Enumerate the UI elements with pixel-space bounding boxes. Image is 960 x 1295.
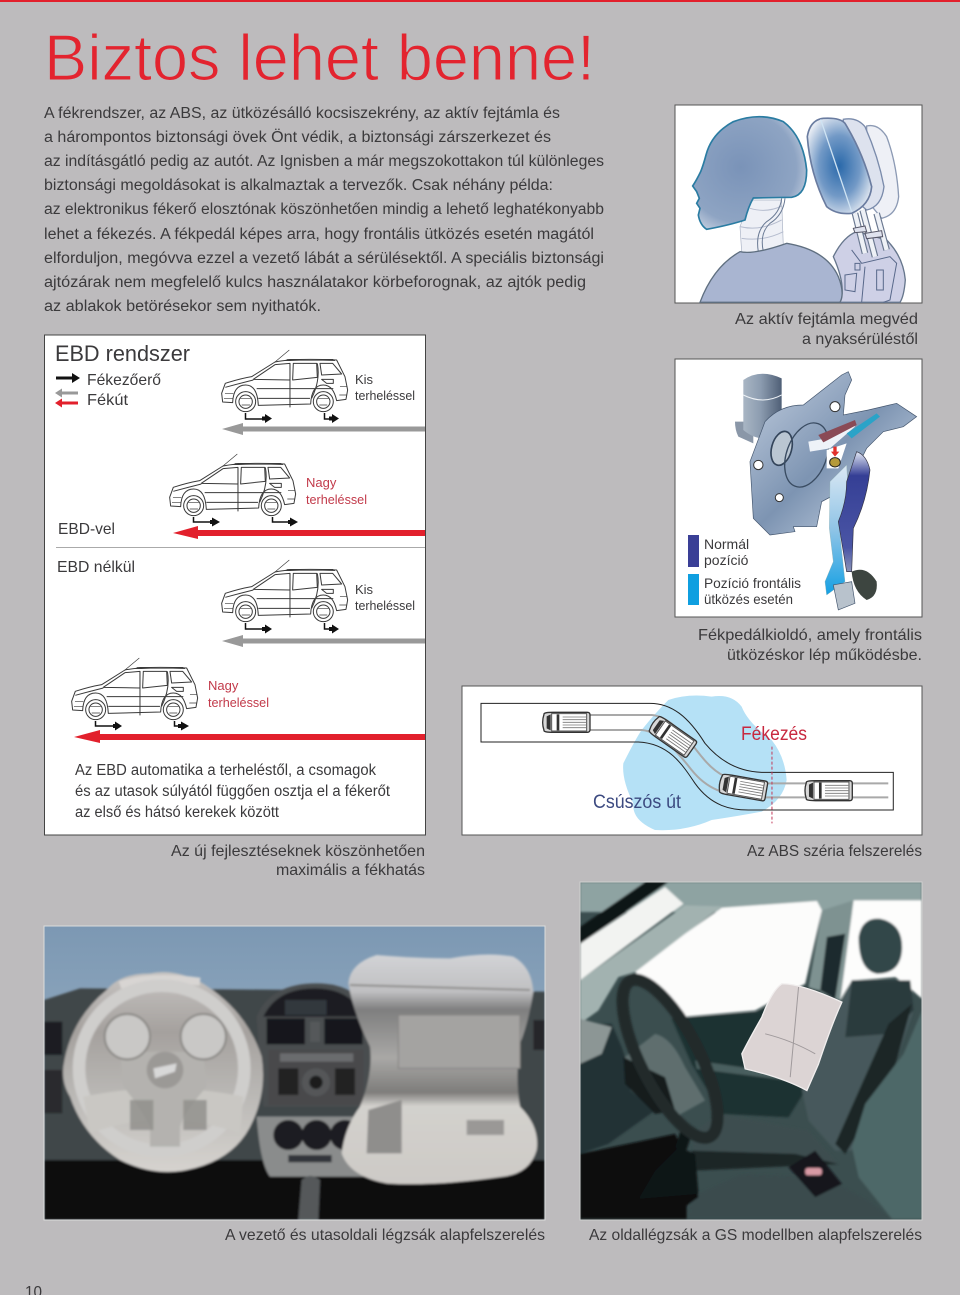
icon: headrest motion (807, 118, 899, 302)
caption: brake pedal: ütközéskor lép működésbe. (727, 647, 922, 664)
car: no EBD with light load (222, 560, 425, 647)
car: no EBD with heavy load (72, 658, 425, 743)
top red rule (0, 0, 960, 2)
caption: new developments: maximális a fékhatás (276, 862, 425, 879)
car position 4 (805, 781, 852, 801)
caption: new developments: Az új fejlesztéseknek köszönhetően (171, 843, 425, 860)
caption: new developments (171, 843, 425, 879)
icon: seat back (833, 232, 905, 302)
car position 3 (718, 773, 768, 801)
car: no EBD with heavy load: Nagy (208, 678, 239, 693)
car position 2 (647, 715, 697, 758)
car position 1 (543, 712, 590, 732)
passenger airbag (342, 955, 537, 1184)
intro text block: lehet a fékezés. A fékpedál képes arra, hogy frontális ütközés esetén magától (44, 226, 594, 243)
slippery patch (623, 696, 787, 830)
dash (580, 1024, 655, 1154)
EBD legend (55, 372, 161, 409)
icon: pedal bracket (735, 372, 917, 535)
caption: brake pedal (698, 627, 922, 664)
panel: brake pedal release (675, 359, 922, 617)
label: slippery road: Csúszós út (593, 792, 682, 813)
photo: side airbag in seat (580, 882, 922, 1220)
legend: frontal collision position: ütközés esetén (704, 591, 793, 607)
panel: active headrest (675, 105, 922, 303)
caption: front airbags: A vezető és utasoldali légzsák alapfelszerelés (225, 1227, 545, 1244)
seat back (802, 980, 914, 1151)
intro text block: biztonsági megoldásokat is alkalmaztak a tervezők. Csak néhány példa: (44, 177, 553, 194)
panel: ABS diagram (462, 686, 922, 835)
car: no EBD with light load: terheléssel (355, 598, 415, 613)
icon: neck (740, 198, 785, 253)
car: no EBD with heavy load: terheléssel (208, 695, 269, 710)
caption: active headrest: a nyaksérüléstől (802, 331, 918, 348)
car: EBD with heavy load: terheléssel (306, 492, 367, 507)
legend: frontal collision position (688, 574, 801, 607)
title: Biztos lehet benne! (44, 21, 595, 94)
intro text block: ajtózárak nem megfelelő kulcs használatakor körbeforognak, az ajtók pedig (44, 274, 586, 291)
intro text block (44, 105, 604, 315)
label: with EBD: EBD-vel (58, 521, 115, 538)
door panel (672, 987, 820, 1117)
EBD description: az első és hátsó kerekek között (75, 804, 280, 821)
road (481, 703, 893, 810)
panel: EBD system (44, 335, 426, 835)
icon: pedal positions (825, 452, 877, 610)
EBD description: Az EBD automatika a terheléstől, a csomagok (75, 762, 376, 779)
icon: head (693, 117, 807, 229)
intro text block: elforduljon, megóvva ezzel a vezető lábát a sérülésektől. A speciális biztonsági (44, 250, 604, 267)
EBD legend: Fékút (87, 392, 129, 409)
legend: normal position (688, 535, 749, 568)
caption: active headrest: Az aktív fejtámla megvéd (735, 311, 918, 328)
braking line (770, 747, 773, 823)
car: no EBD with light load: Kis (355, 582, 374, 597)
caption: side airbag: Az oldallégzsák a GS modellben alapfelszerelés (589, 1227, 922, 1244)
legend: frontal collision position: Pozíció frontális (704, 575, 801, 591)
caption: active headrest (735, 311, 918, 348)
caption: brake pedal: Fékpedálkioldó, amely frontális (698, 627, 922, 644)
car: EBD with light load: terheléssel (355, 388, 415, 403)
photo: dashboard with airbags (44, 926, 545, 1220)
EBD description (75, 762, 391, 821)
intro text block: az indításgátló pedig az autót. Az Ignisben a már megszokottakon túl különleges (44, 153, 604, 170)
driver airbag (63, 972, 263, 1172)
steering wheel (625, 1034, 705, 1117)
EBD description: és az utasok súlyától függően osztja el a fékerőt (75, 783, 391, 800)
intro text block: az ablakok betörésekor sem nyithatók. (44, 298, 321, 315)
EBD heading: EBD rendszer (55, 341, 190, 366)
label: without EBD: EBD nélkül (57, 559, 135, 576)
car: EBD with light load: Kis (355, 372, 374, 387)
seat cushion (692, 1114, 839, 1164)
intro text block: az elektronikus fékerő elosztónak köszönhetően mindig a lehető leghatékonyabb (44, 201, 604, 218)
car: EBD with heavy load: Nagy (306, 475, 337, 490)
side airbag (742, 984, 842, 1091)
legend: normal position: Normál (704, 536, 749, 552)
car: EBD with heavy load (170, 454, 425, 539)
intro text block: a hárompontos biztonsági övek Önt védik, a biztonsági zárszerkezet és (44, 128, 551, 146)
label: braking: Fékezés (741, 724, 807, 745)
intro text block: A fékrendszer, az ABS, az ütközésálló kocsiszekrény, az aktív fejtámla és (44, 105, 560, 122)
car: EBD with light load (222, 350, 425, 435)
roof (580, 882, 922, 912)
EBD legend: Fékezőerő (87, 372, 161, 389)
legend: normal position: pozíció (704, 552, 749, 568)
icon: shoulders (700, 243, 842, 302)
tyre tracks (588, 715, 888, 797)
caption: ABS: Az ABS széria felszerelés (747, 843, 922, 860)
